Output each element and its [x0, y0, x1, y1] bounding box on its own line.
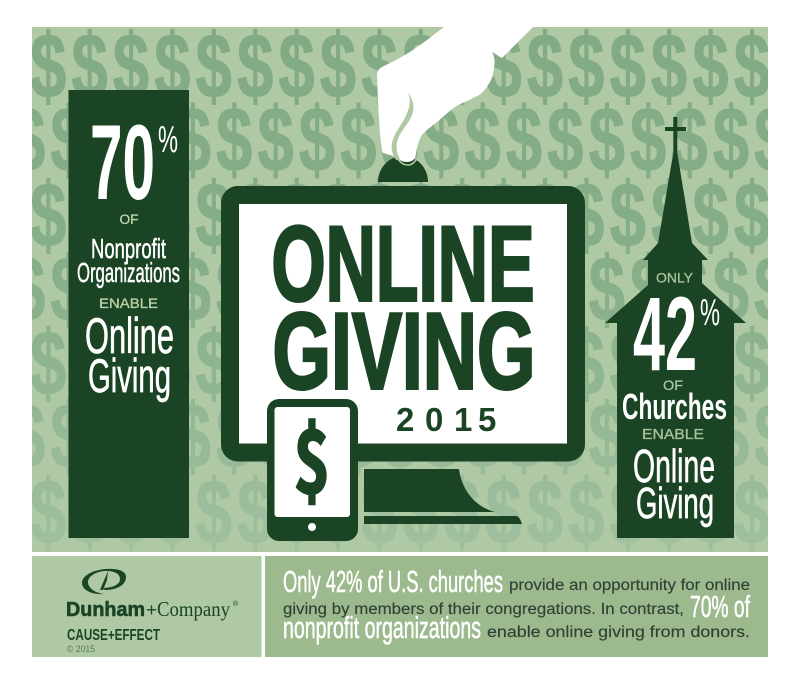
label: nonprofit organizations [77, 233, 180, 288]
label: nonprofit organizations: Nonprofit [91, 233, 166, 264]
icon: monitor [230, 195, 576, 524]
panel: company logo [32, 556, 262, 657]
panel: summary text [265, 556, 768, 657]
label: online giving: Online [633, 440, 715, 492]
stat: 70 percent: % [158, 119, 178, 161]
tagline: cause+effect: CAUSE+EFFECT [67, 627, 160, 644]
icon: smartphone with dollar sign: $ [293, 391, 331, 520]
summary line 2: giving by members of their congregations. In contrast, [283, 601, 684, 618]
logo wordmark: ® [233, 600, 239, 608]
summary line 1: provide an opportunity for online [509, 577, 750, 594]
stat: 42 percent: % [700, 292, 720, 334]
summary line 1: Only 42% of U.S. churches [283, 564, 503, 599]
label: online giving: Giving [88, 349, 171, 402]
monitor frame and screen [230, 195, 576, 452]
label: nonprofit organizations: Organizations [77, 257, 180, 288]
title: online giving: GIVING [272, 290, 536, 412]
stat: 70 percent: 70 [90, 102, 155, 222]
label: enable: ENABLE [642, 427, 704, 443]
logo wordmark: Dunham [66, 599, 145, 621]
summary line 3 [283, 610, 750, 645]
copyright: © 2015 [67, 644, 95, 654]
church silhouette [605, 117, 746, 538]
summary line 3: enable online giving from donors. [487, 624, 750, 641]
logo wordmark: Company [157, 597, 230, 621]
summary line 2: 70% of [690, 589, 750, 624]
label: only: ONLY [656, 270, 693, 286]
title: online giving [272, 204, 536, 412]
label: of: OF [663, 378, 683, 393]
logo mark [82, 569, 126, 594]
icon: button knob [378, 156, 428, 182]
year: 2015: 2015 [396, 401, 496, 438]
label: churches: Churches [622, 386, 727, 427]
logo wordmark [66, 597, 239, 621]
label: online giving [85, 308, 174, 402]
title: online giving: ONLINE [272, 204, 534, 324]
logo wordmark: + [146, 600, 157, 620]
panel: church 42% [605, 117, 746, 538]
label: online giving: Giving [636, 479, 714, 528]
label: online giving: Online [85, 308, 174, 364]
panel: dollar sign background [32, 27, 768, 552]
panel: 70% nonprofit organizations [68, 90, 189, 538]
monitor stand [364, 469, 495, 512]
summary line 3: nonprofit organizations [283, 610, 481, 645]
label: online giving [633, 440, 715, 528]
stat: 42 percent: 42 [633, 276, 697, 393]
icon: hand pressing button [377, 27, 533, 182]
label: enable: ENABLE [99, 296, 158, 311]
summary line 2 [283, 589, 750, 624]
icon: smartphone with dollar sign [267, 391, 358, 541]
label: of: OF [120, 212, 138, 227]
